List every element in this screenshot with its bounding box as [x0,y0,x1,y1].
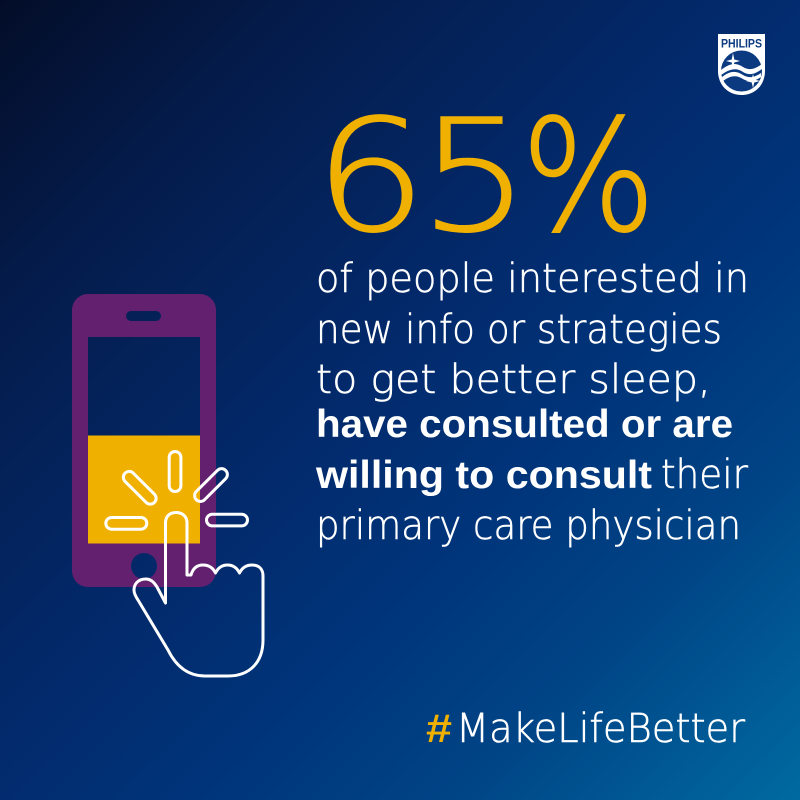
hand outline [134,512,263,676]
description text block: of people interested in [316,256,749,302]
description text block: their [661,452,749,498]
big statistic: 65%: 5 [419,86,530,267]
logo: Philips shield: PHILIPS [721,38,762,50]
phone body with transparent screen, speaker and button [72,294,216,587]
hashtag: #MakeLifeBetter: # [426,707,452,751]
description text block: new info or strategies [316,307,722,353]
tap burst lines [106,452,248,529]
logo: Philips shield [718,34,765,95]
description text block: to get better sleep, [316,357,711,403]
description text block: primary care physician [316,503,741,549]
description text block: have consulted or are [316,403,733,446]
screen fill level [88,436,200,544]
big statistic: 65% [314,86,656,267]
icon: smartphone with tapping hand [72,294,263,676]
big statistic: 65%: 6 [314,86,427,267]
description text block: willing to consult [315,454,652,497]
description text block [315,256,749,549]
big statistic: 65%: % [521,86,656,267]
hashtag: #MakeLifeBetter: MakeLifeBetter [456,706,746,752]
